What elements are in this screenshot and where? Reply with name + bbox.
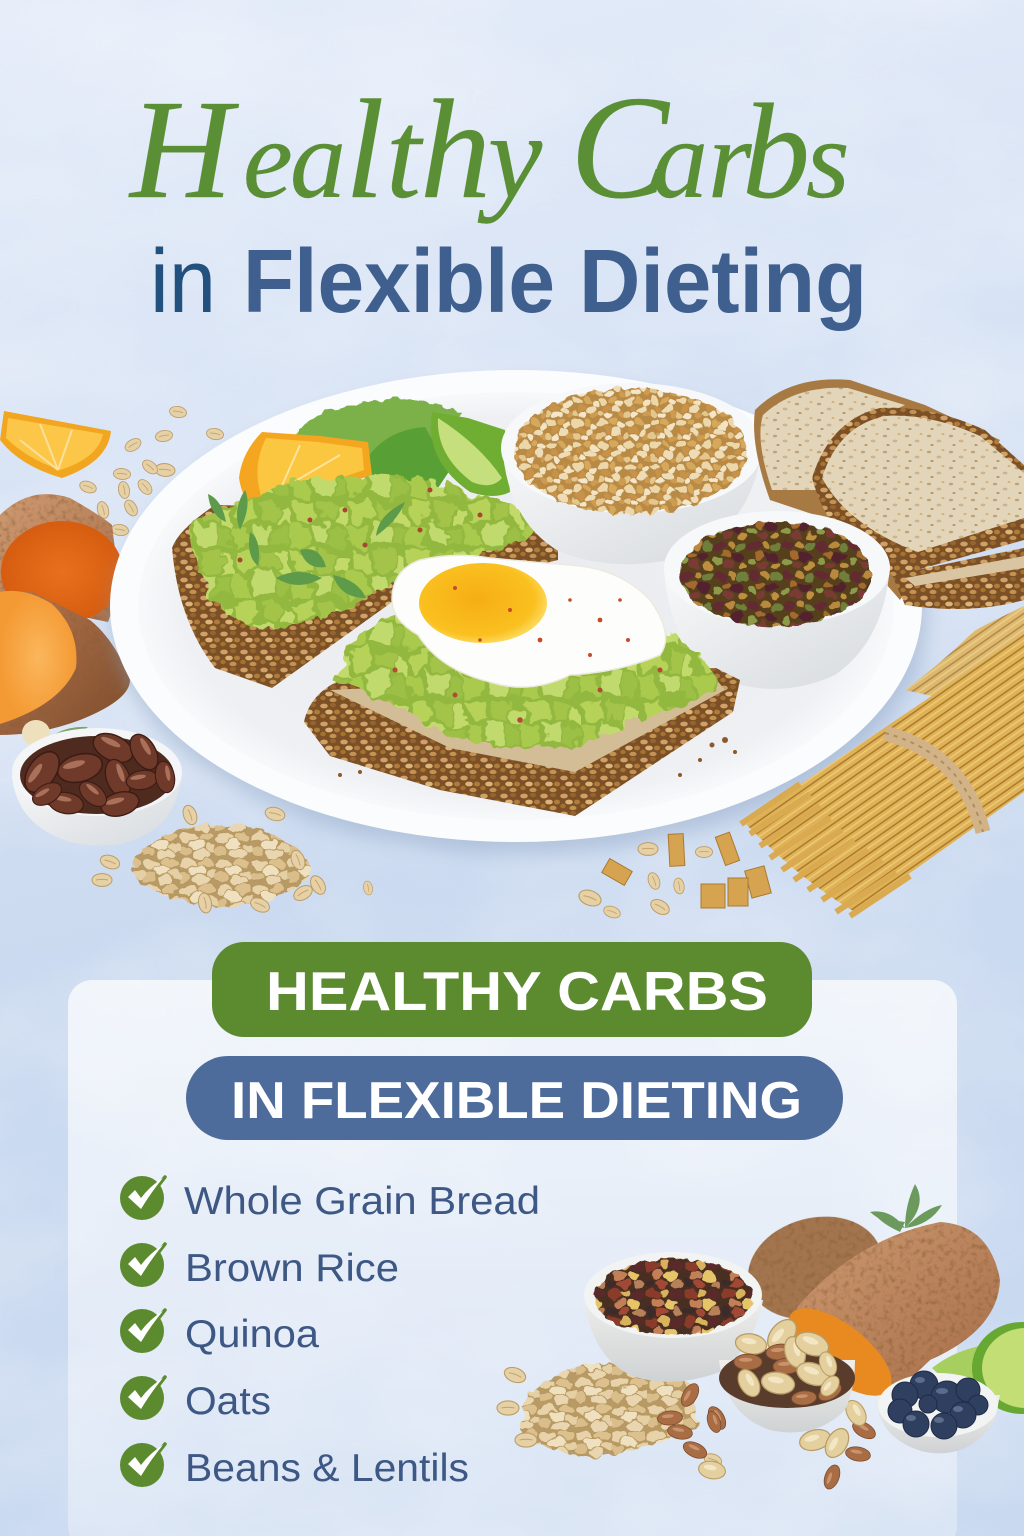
item: Brown Rice	[120, 1243, 399, 1290]
small beans bowl	[12, 720, 182, 846]
plate	[110, 370, 928, 854]
script heading: Healthy Carbs: r	[708, 98, 752, 222]
oats pile lower left	[92, 803, 374, 915]
item: Quinoa: Quinoa	[185, 1313, 319, 1356]
item: Oats	[120, 1376, 271, 1423]
script heading: Healthy Carbs: h	[420, 70, 491, 228]
green banner: HEALTHY CARBS: HEALTHY CARBS	[266, 960, 768, 1022]
script heading: Healthy Carbs: t	[386, 86, 424, 225]
herb sprig	[870, 1184, 942, 1232]
info panel	[68, 980, 957, 1536]
lower right food group	[497, 1184, 1024, 1491]
subheading: in Flexible Dieting: in	[150, 232, 216, 332]
blue banner: IN FLEXIBLE DIETING	[186, 1056, 843, 1140]
script heading: Healthy Carbs: a	[652, 98, 708, 222]
script heading: Healthy Carbs: y	[477, 89, 543, 224]
orange wedge	[0, 411, 111, 478]
item: Brown Rice: Brown Rice	[185, 1247, 399, 1290]
hero food scene	[0, 370, 1024, 920]
script heading: Healthy Carbs: l	[345, 70, 384, 228]
checklist	[120, 1176, 540, 1490]
scattered almonds	[657, 1381, 878, 1491]
back avocado toast	[172, 476, 558, 688]
sweet potatoes	[736, 1202, 1000, 1411]
script heading: Healthy Carbs: H	[128, 70, 239, 228]
nut bowl	[719, 1314, 855, 1432]
fried egg	[392, 555, 666, 687]
pasta pieces and flakes	[577, 832, 771, 920]
bean medley bowl	[664, 511, 890, 689]
item: Quinoa	[120, 1309, 319, 1356]
oats pile	[497, 1362, 723, 1468]
lime slices	[932, 1322, 1024, 1414]
herb leaves	[208, 490, 405, 598]
item: Whole Grain Bread: Whole Grain Bread	[184, 1180, 540, 1223]
item: Beans & Lentils: Beans & Lentils	[185, 1447, 469, 1490]
subheading: in Flexible Dieting: Dieting	[579, 232, 867, 332]
script heading: Healthy Carbs: e	[243, 98, 293, 222]
script heading: Healthy Carbs: s	[806, 98, 850, 222]
script heading: Healthy Carbs: C	[570, 66, 671, 230]
lettuce, lemon, lime garnish	[239, 399, 510, 512]
bread slices	[754, 379, 1024, 609]
wholegrain pasta bundle	[741, 606, 1024, 916]
script heading: Healthy Carbs: b	[742, 77, 810, 227]
item: Oats: Oats	[185, 1380, 271, 1423]
green banner: HEALTHY CARBS	[212, 942, 812, 1037]
mixed beans bowl	[584, 1252, 763, 1382]
script heading: Healthy Carbs: a	[290, 98, 346, 222]
subheading: in Flexible Dieting	[150, 232, 867, 332]
crumbs on plate	[338, 737, 737, 777]
title	[128, 66, 867, 332]
grain bowl	[501, 383, 763, 564]
oats scattered upper left	[78, 405, 224, 537]
front avocado toast with egg	[304, 555, 740, 816]
sweet potato halves	[0, 494, 130, 735]
blue banner: IN FLEXIBLE DIETING: IN FLEXIBLE DIETING	[231, 1072, 802, 1130]
subheading: in Flexible Dieting: Flexible	[243, 232, 555, 332]
blueberry bowl	[876, 1371, 1000, 1453]
